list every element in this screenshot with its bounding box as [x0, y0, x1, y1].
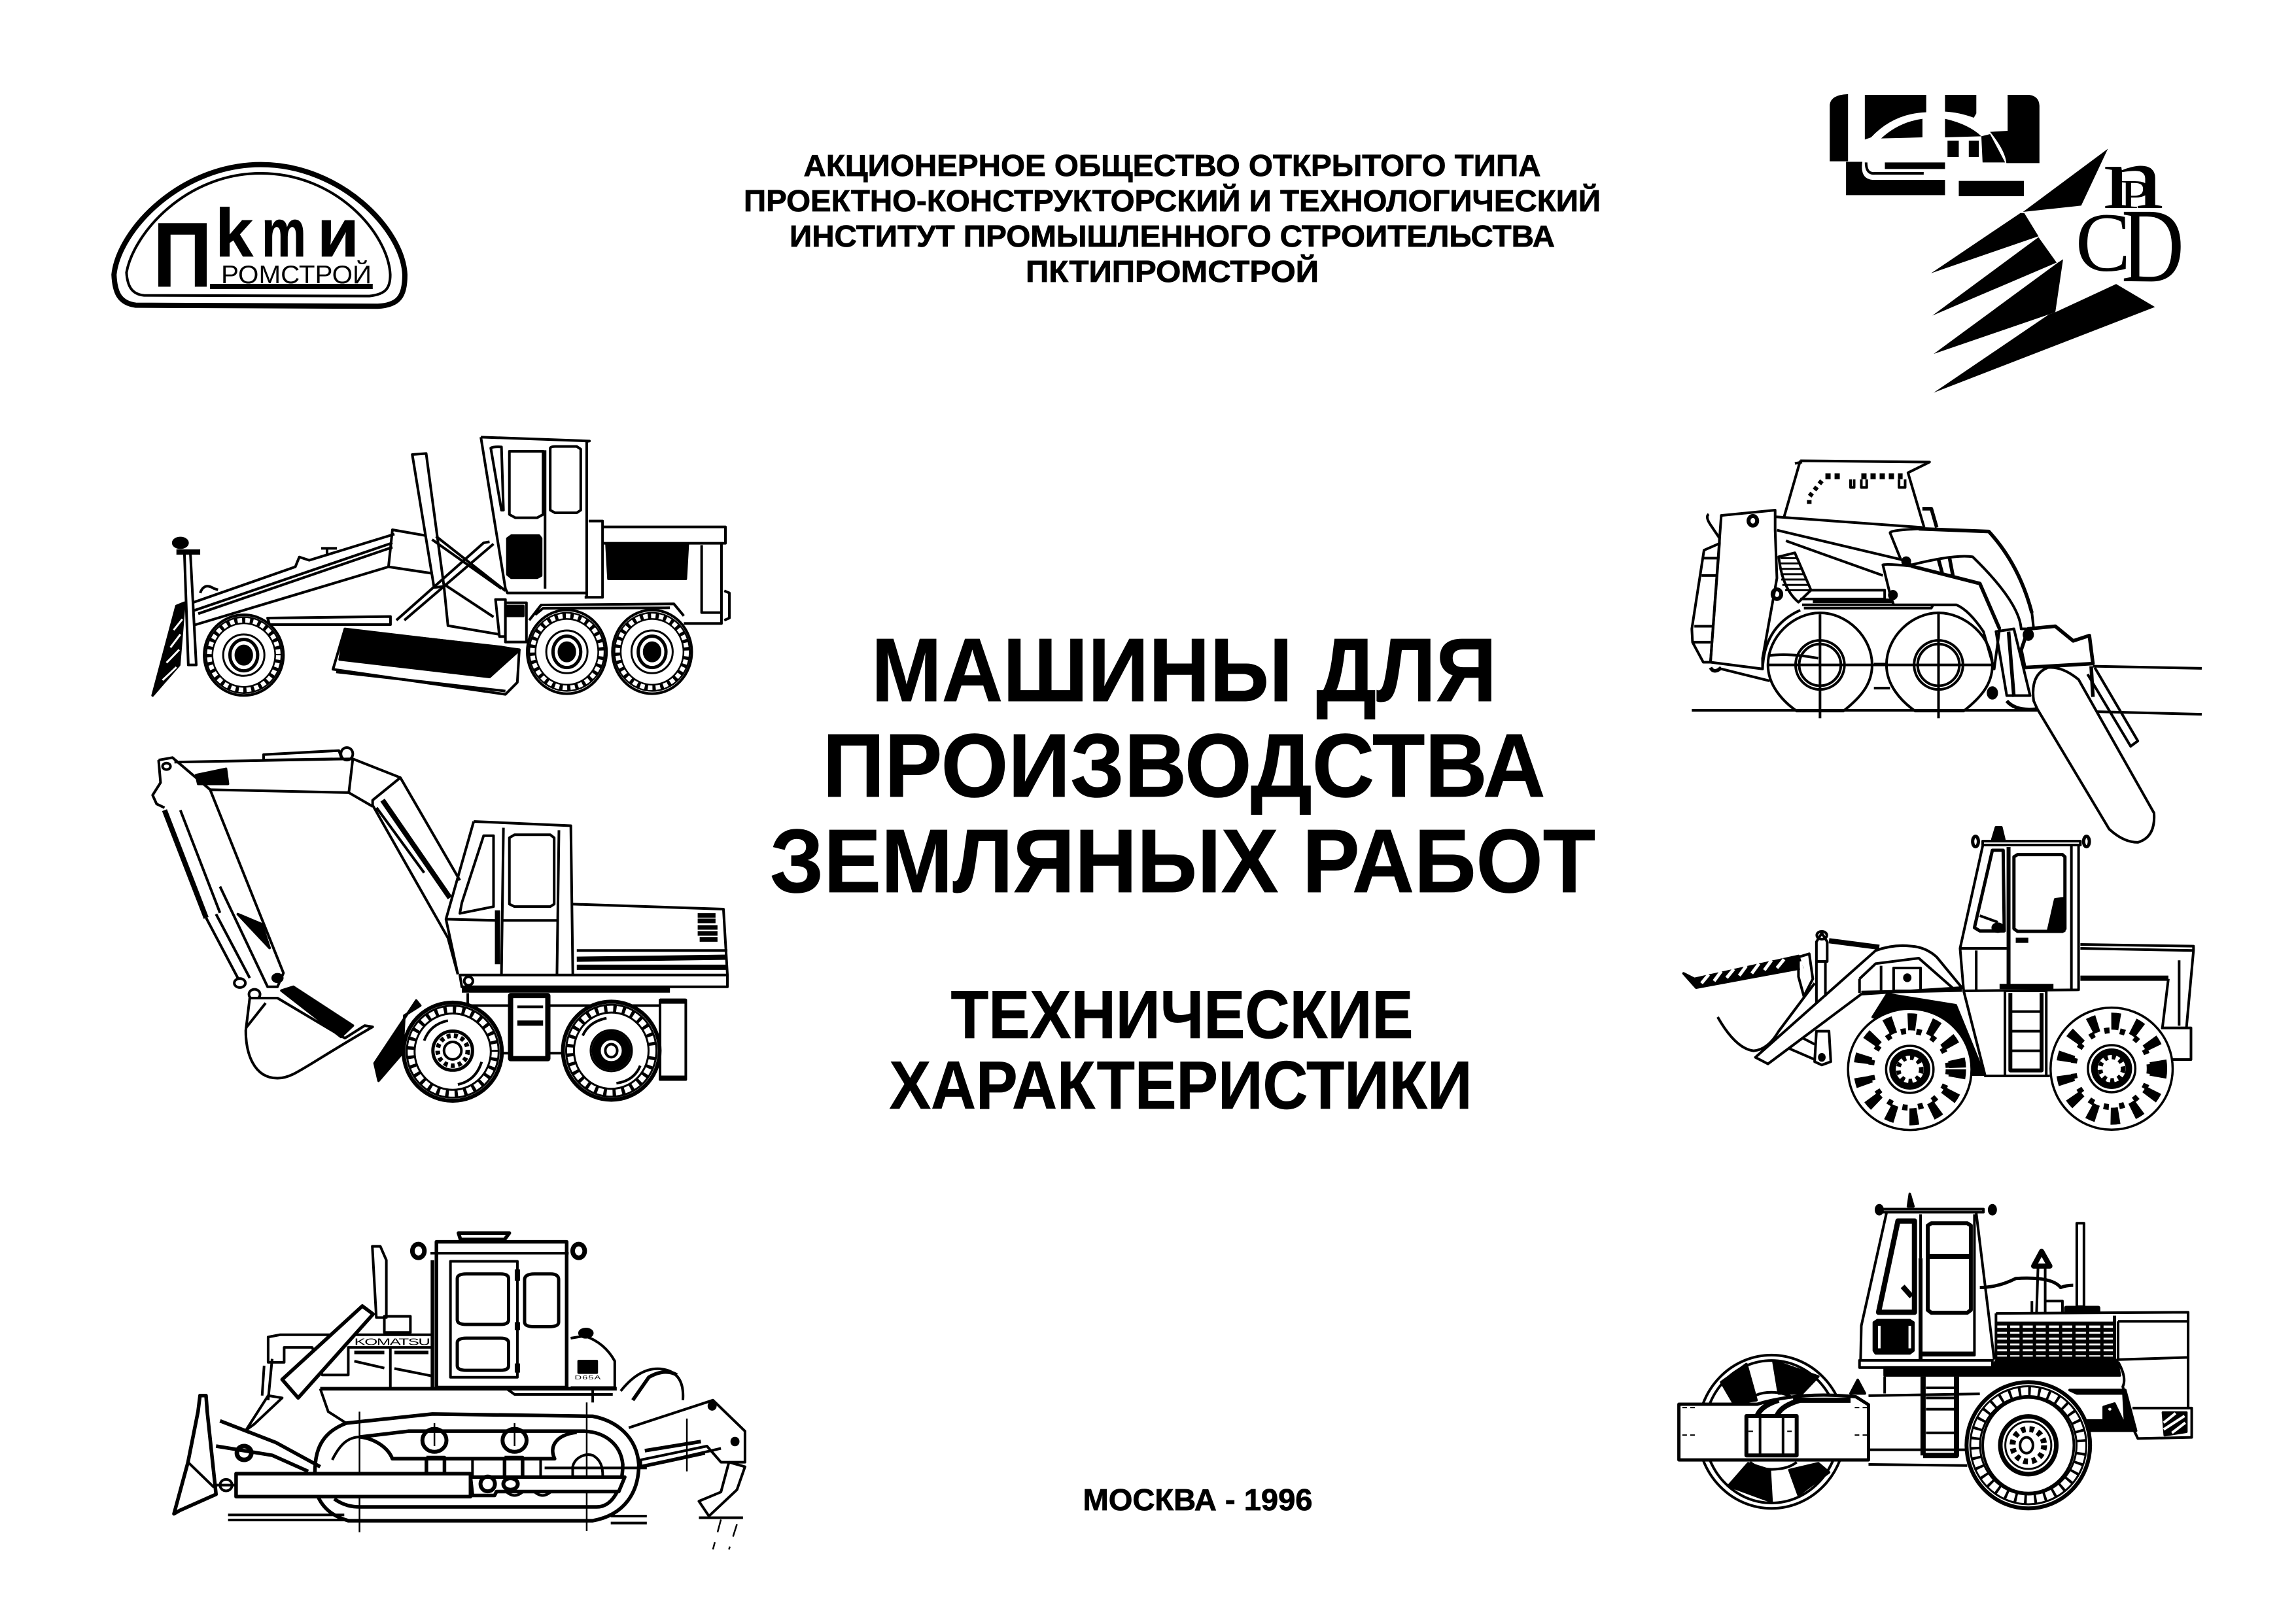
machine: motor grader [152, 437, 729, 695]
rear hood [570, 1329, 615, 1387]
subtitle: ХАРАКТЕРИСТИКИ [890, 1048, 1472, 1124]
ladder and chassis [1964, 991, 2050, 1076]
cab [446, 821, 573, 975]
rear wheel [1966, 1382, 2090, 1508]
header: organisation name: ИНСТИТУТ ПРОМЫШЛЕННОГО СТРОИТЕЛЬСТВА [790, 219, 1555, 253]
ripper [621, 1369, 745, 1549]
rear panel [1692, 510, 1781, 681]
wheels [204, 610, 691, 695]
front post and lamp [152, 538, 200, 695]
mid body and ladder [1868, 1377, 1980, 1466]
engine [529, 521, 729, 623]
wheels [404, 1001, 659, 1101]
cab [481, 437, 589, 597]
title: ПРОИЗВОДСТВА [823, 716, 1545, 816]
machine: wheel loader [1684, 827, 2193, 1130]
undercarriage [462, 990, 686, 1079]
monogram letters [2076, 128, 2184, 305]
cab [1860, 1194, 1996, 1368]
hood: KOMATSU [355, 1337, 430, 1347]
header: organisation name: АКЦИОНЕРНОЕ ОБЩЕСТВО ОТКРЫТОГО ТИПА [803, 148, 1541, 182]
drum frame [1679, 1380, 1868, 1460]
boom [175, 748, 460, 975]
machine: wheeled excavator [152, 748, 727, 1101]
engine [460, 904, 727, 987]
stamp: noisy dark block [1830, 94, 2040, 196]
lift cylinder [246, 1306, 373, 1430]
stick [152, 757, 283, 999]
fender shadow [1873, 994, 1984, 1075]
wheels [1848, 1008, 2172, 1130]
scarifier columns [396, 453, 506, 634]
header: organisation name: ПКТИПРОМСТРОЙ [1026, 254, 1319, 288]
blade [333, 629, 519, 695]
engine [2080, 944, 2193, 1060]
bucket [246, 987, 373, 1079]
monogram letters: Р [2119, 173, 2151, 217]
machine: crawler bulldozer [174, 1233, 745, 1549]
title [770, 620, 1595, 912]
chassis [321, 1389, 617, 1423]
rear hood: D65A [575, 1374, 600, 1381]
frame and boom [192, 530, 527, 642]
subtitle [890, 977, 1472, 1124]
trencher chain [2033, 667, 2154, 842]
logo: PKTI Promstroy: и [317, 196, 359, 271]
logo: PKTI Promstroy: П [153, 203, 212, 306]
header: organisation name [744, 148, 1601, 288]
ground lines [1692, 666, 2202, 714]
blade and push arm [174, 1396, 321, 1514]
lift arm [1756, 946, 1962, 1064]
machine: vibratory road roller [1679, 1194, 2192, 1508]
hood [268, 1247, 432, 1389]
bucket [1684, 954, 1815, 1051]
cab [1960, 827, 2089, 991]
cage [1784, 460, 1937, 527]
attachment head [1988, 626, 2093, 710]
engine grille [1885, 1312, 2188, 1375]
crawler track [315, 1402, 647, 1532]
subtitle: ТЕХНИЧЕСКИЕ [951, 977, 1413, 1053]
drum [1698, 1355, 1845, 1508]
machine: skid steer with trencher [1692, 460, 2202, 842]
exhaust and air cleaner [1980, 1223, 2098, 1312]
place and year: МОСКВА - 1996 [1083, 1483, 1312, 1517]
title: ЗЕМЛЯНЫХ РАБОТ [770, 811, 1595, 912]
header: organisation name: ПРОЕКТНО-КОНСТРУКТОРСКИЙ И ТЕХНОЛОГИЧЕСКИЙ [744, 184, 1601, 218]
outrigger blade [375, 1001, 420, 1080]
title: МАШИНЫ ДЛЯ [871, 620, 1497, 721]
rear body [2070, 1321, 2192, 1438]
logo: PKTI Promstroy: m [262, 196, 306, 271]
ground lines [228, 1515, 647, 1523]
monogram letters: С [2076, 196, 2131, 289]
logo: PKTI Promstroy: РОМСТРОЙ [221, 260, 372, 289]
monogram letters: D [2121, 188, 2184, 305]
logo: PKTI Promstroy: k [215, 196, 253, 271]
monogram letters: n [2102, 128, 2164, 228]
logo: PKTI Promstroy [114, 165, 405, 306]
bucket cylinder and links [1790, 931, 1879, 1065]
body and arms [1775, 517, 2034, 669]
wheels [1763, 610, 1994, 718]
star: four black spikes [1931, 149, 2155, 392]
cab [412, 1233, 585, 1387]
logo: stamp and star emblem [1830, 94, 2184, 392]
lower beam [236, 1474, 625, 1496]
